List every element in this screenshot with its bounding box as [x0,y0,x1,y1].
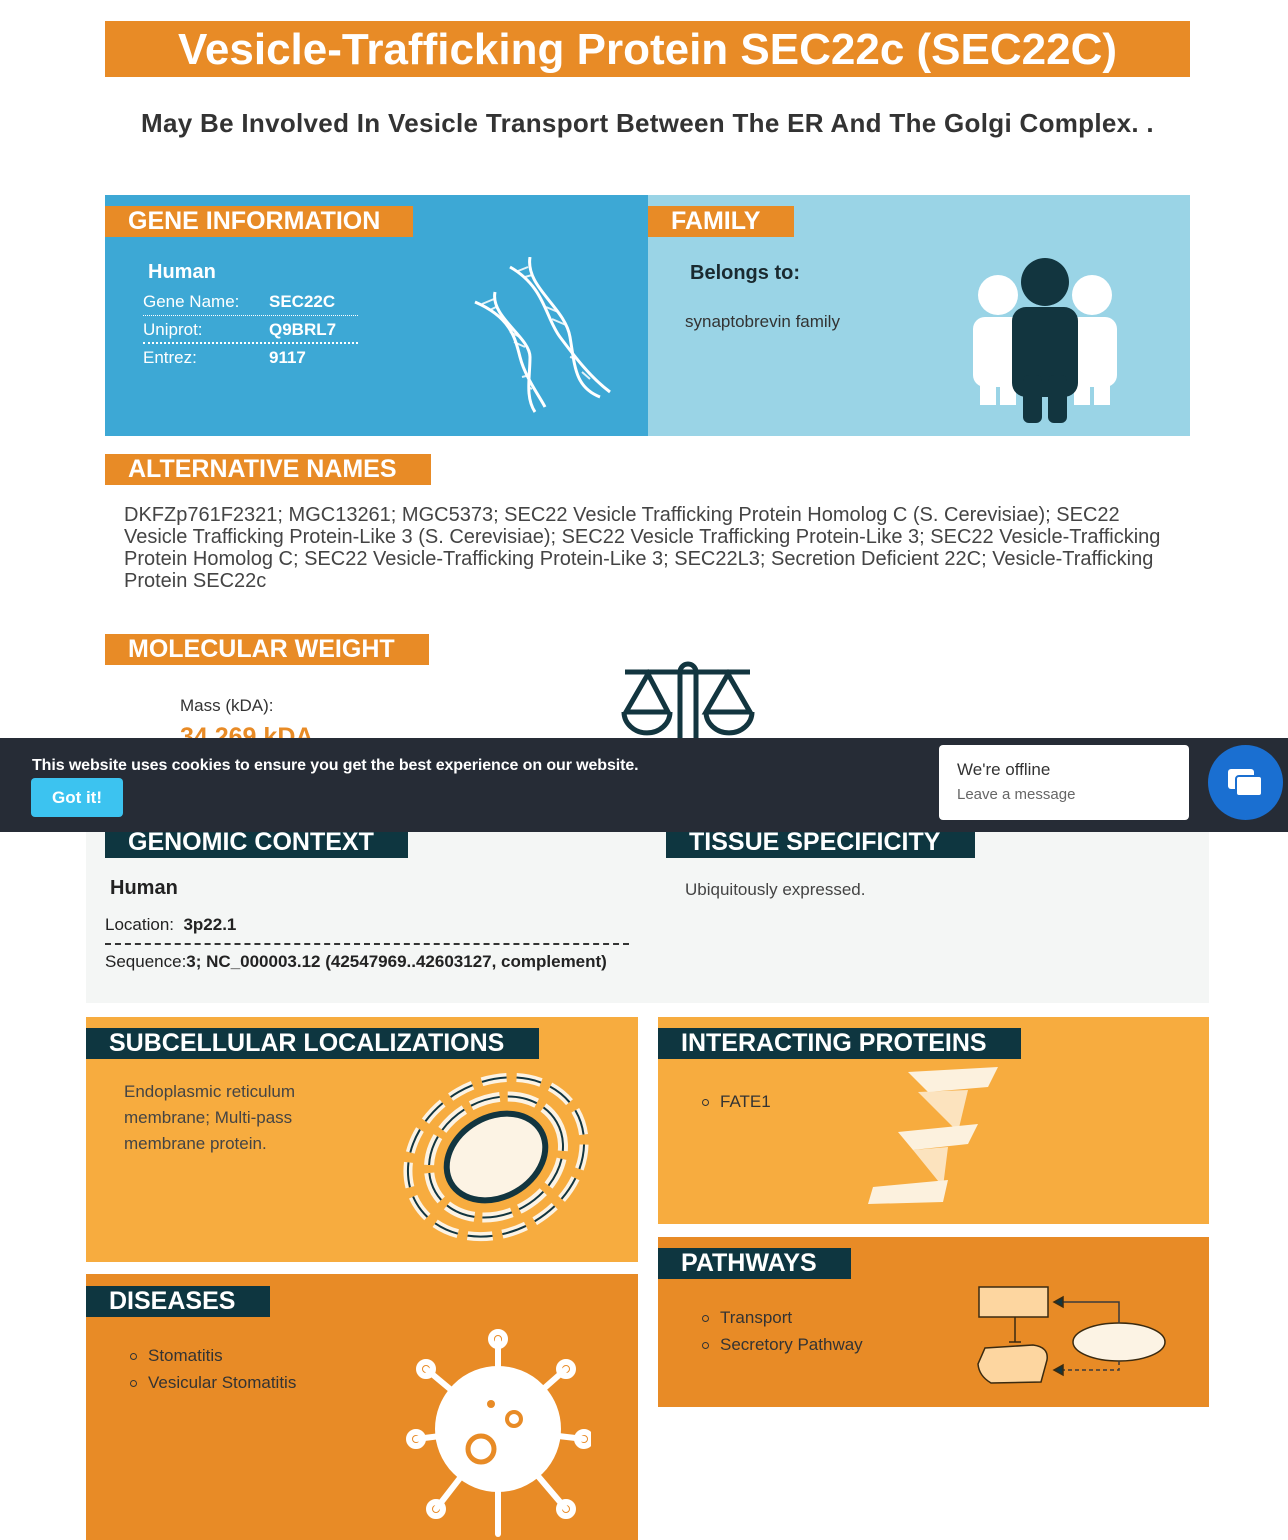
belongs to: Belongs to: [690,262,800,284]
gene info table: SEC22C [269,292,335,311]
icon: pathway diagram [977,1286,1166,1384]
chat box: Leave a message [957,786,1075,803]
mass label: Mass (kDA): [180,696,274,715]
icon: helix [868,1067,998,1204]
heading: diseases: DISEASES [109,1287,235,1315]
location: Location: 3p22.1 [105,915,236,934]
disease list [130,1346,296,1392]
heading: interacting: INTERACTING PROTEINS [681,1029,987,1057]
tissue text: Ubiquitously expressed. [685,880,865,899]
disease list: Vesicular Stomatitis [148,1373,296,1392]
pathways list: Transport [720,1308,792,1327]
icon: scale [622,662,754,738]
gene info table: Q9BRL7 [269,320,336,339]
icon: chat [1208,745,1283,820]
heading: pathways [658,1248,851,1279]
sequence: Sequence:3; NC_000003.12 (42547969..42603127, complement) [105,952,607,971]
panel: interacting proteins [658,1017,1209,1224]
heading: molecular weight: MOLECULAR WEIGHT [128,635,395,663]
panel: gene information [105,195,648,436]
pathways list [702,1308,863,1354]
icon: virus [406,1329,591,1537]
gene info table: Entrez: [143,348,197,367]
gene info table: Gene Name: [143,292,239,311]
location [105,915,629,945]
subcellular text: Endoplasmic reticulum membrane; Multi-pass membrane protein. [124,1082,295,1153]
gene info table [143,261,358,367]
heading: diseases [86,1286,270,1317]
gene info table: Uniprot: [143,320,203,339]
heading: subcellular: SUBCELLULAR LOCALIZATIONS [109,1029,504,1057]
icon: people [973,258,1117,423]
icon: er [403,1073,588,1242]
heading: genomic context: GENOMIC CONTEXT [128,828,374,856]
got it button: Got it! [52,788,102,807]
icon: dna [474,257,611,413]
pathways list: Secretory Pathway [720,1335,863,1354]
cookie text: This website uses cookies to ensure you get the best experience on our website. [32,757,638,774]
interacting list: FATE1 [720,1092,771,1111]
heading: gene information: GENE INFORMATION [128,207,380,235]
heading: alternative names: ALTERNATIVE NAMES [128,455,397,483]
chat box [939,745,1189,820]
heading: family: FAMILY [671,207,760,235]
mass value: 34.269 kDA [180,723,313,751]
panel: subcellular localizations [86,1017,638,1262]
genomic human: Human [110,877,178,899]
title bar: Vesicle-Trafficking Protein SEC22c (SEC22C) [178,25,1117,74]
heading: pathways: PATHWAYS [681,1249,817,1277]
panel: pathways [658,1237,1209,1407]
gene info table: 9117 [269,348,306,367]
heading: family [648,206,794,237]
chat box: We're offline [957,760,1050,779]
gene info table: Human [148,261,216,283]
family text: synaptobrevin family [685,312,840,331]
cookie bar [0,738,1288,832]
subtitle: May Be Involved In Vesicle Transport Between The ER And The Golgi Complex. . [141,108,1154,138]
panel: family [648,195,1190,436]
panel: genomic and tissue [86,800,1209,1003]
heading: tissue specificity: TISSUE SPECIFICITY [689,828,940,856]
disease list: Stomatitis [148,1346,223,1365]
got it button [31,778,123,817]
panel: diseases [86,1274,638,1540]
alternative names text: DKFZp761F2321; MGC13261; MGC5373; SEC22 Vesicle Trafficking Protein Homolog C (S. Cerevisiae); SEC22 Vesicle Trafficking Protein-Like 3 (S. Cerevisiae); SEC22 Vesicle Trafficking Protein-Like 3; SEC22 Vesicle-Trafficking Protein Homolog C; SEC22 Vesicle-Trafficking Protein-Like 3; SEC22L3; Secretion Deficient 22C; Vesicle-Trafficking Protein SEC22c [124,504,1160,592]
